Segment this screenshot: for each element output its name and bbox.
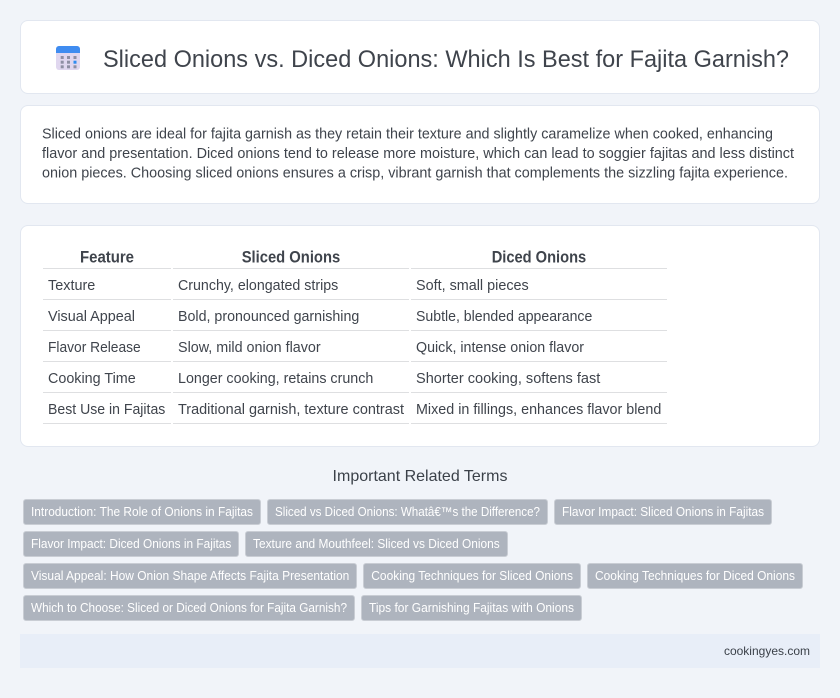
tag: flavor impact diced bbox=[24, 532, 238, 556]
tag: tips bbox=[362, 596, 582, 620]
comparison table bbox=[43, 248, 667, 424]
row: flavor release: Quick, intense onion flavor bbox=[416, 339, 584, 356]
tag: cooking diced: Cooking Techniques for Diced Onions bbox=[595, 569, 795, 583]
title: Sliced Onions vs. Diced Onions: Which Is Best for Fajita Garnish? bbox=[103, 46, 789, 73]
tag: flavor impact sliced bbox=[554, 500, 772, 524]
row: texture: Texture bbox=[48, 277, 95, 294]
table header row bbox=[80, 248, 586, 266]
tag: which to choose bbox=[24, 596, 354, 620]
row: visual appeal bbox=[48, 308, 592, 325]
row: texture: Soft, small pieces bbox=[416, 277, 529, 294]
row: flavor release: Flavor Release bbox=[48, 339, 141, 356]
intro paragraph bbox=[42, 126, 795, 182]
table header row: Sliced Onions bbox=[242, 248, 340, 266]
table header row: Diced Onions bbox=[492, 248, 586, 266]
icon: calendar bbox=[56, 46, 80, 70]
row: cooking time: Cooking Time bbox=[48, 370, 136, 387]
row: cooking time: Longer cooking, retains crunch bbox=[178, 370, 373, 387]
row: cooking time: Shorter cooking, softens fast bbox=[416, 370, 601, 387]
row: flavor release: Slow, mild onion flavor bbox=[178, 339, 321, 356]
row: best use in fajitas: Mixed in fillings, enhances flavor blend bbox=[416, 401, 661, 418]
tag: cooking sliced: Cooking Techniques for Sliced Onions bbox=[371, 569, 573, 583]
tag: which to choose: Which to Choose: Sliced or Diced Onions for Fajita Garnish? bbox=[31, 601, 347, 615]
row: best use in fajitas bbox=[48, 401, 661, 418]
row: visual appeal: Bold, pronounced garnishing bbox=[178, 308, 359, 325]
footer bar bbox=[20, 634, 820, 668]
tag: sliced vs diced bbox=[268, 500, 548, 524]
tag: texture and mouthfeel bbox=[246, 532, 508, 556]
comparison table panel bbox=[20, 225, 820, 447]
row: flavor release bbox=[48, 339, 584, 356]
row: texture bbox=[48, 277, 529, 294]
tag: visual appeal bbox=[24, 564, 356, 588]
tag: texture and mouthfeel: Texture and Mouthfeel: Sliced vs Diced Onions bbox=[253, 537, 500, 551]
intro paragraph: onion pieces. Choosing sliced onions ensures a crisp, vibrant garnish that complements the sizzling fajita experience. bbox=[42, 164, 788, 182]
tag: introduction: Introduction: The Role of Onions in Fajitas bbox=[31, 505, 253, 519]
row: best use in fajitas: Best Use in Fajitas bbox=[48, 401, 165, 418]
table header row: Feature bbox=[80, 248, 134, 266]
intro paragraph: flavor and presentation. Diced onions tend to release more moisture, which can lead to soggier fajitas and less distinct bbox=[42, 145, 795, 162]
footer bar: cookingyes.com bbox=[724, 644, 810, 658]
intro paragraph: Sliced onions are ideal for fajita garnish as they retain their texture and slightly caramelize when cooked, enhancing bbox=[42, 126, 773, 142]
tag: cooking sliced bbox=[364, 564, 580, 588]
tag: sliced vs diced: Sliced vs Diced Onions: Whatâ€™s the Difference? bbox=[275, 505, 540, 519]
tag: introduction bbox=[24, 500, 260, 524]
row: best use in fajitas: Traditional garnish, texture contrast bbox=[178, 401, 405, 418]
title card bbox=[20, 20, 820, 94]
tag: flavor impact diced: Flavor Impact: Diced Onions in Fajitas bbox=[31, 537, 231, 551]
related terms heading: Important Related Terms bbox=[333, 468, 507, 485]
row: texture: Crunchy, elongated strips bbox=[178, 277, 338, 294]
tag: visual appeal: Visual Appeal: How Onion Shape Affects Fajita Presentation bbox=[31, 569, 349, 583]
tag: tips: Tips for Garnishing Fajitas with Onions bbox=[369, 601, 574, 615]
row: cooking time bbox=[48, 370, 601, 387]
tag: cooking diced bbox=[588, 564, 802, 588]
intro text panel bbox=[20, 105, 820, 204]
tag: flavor impact sliced: Flavor Impact: Sliced Onions in Fajitas bbox=[562, 505, 764, 519]
row: visual appeal: Visual Appeal bbox=[48, 308, 135, 325]
row: visual appeal: Subtle, blended appearance bbox=[416, 308, 592, 325]
